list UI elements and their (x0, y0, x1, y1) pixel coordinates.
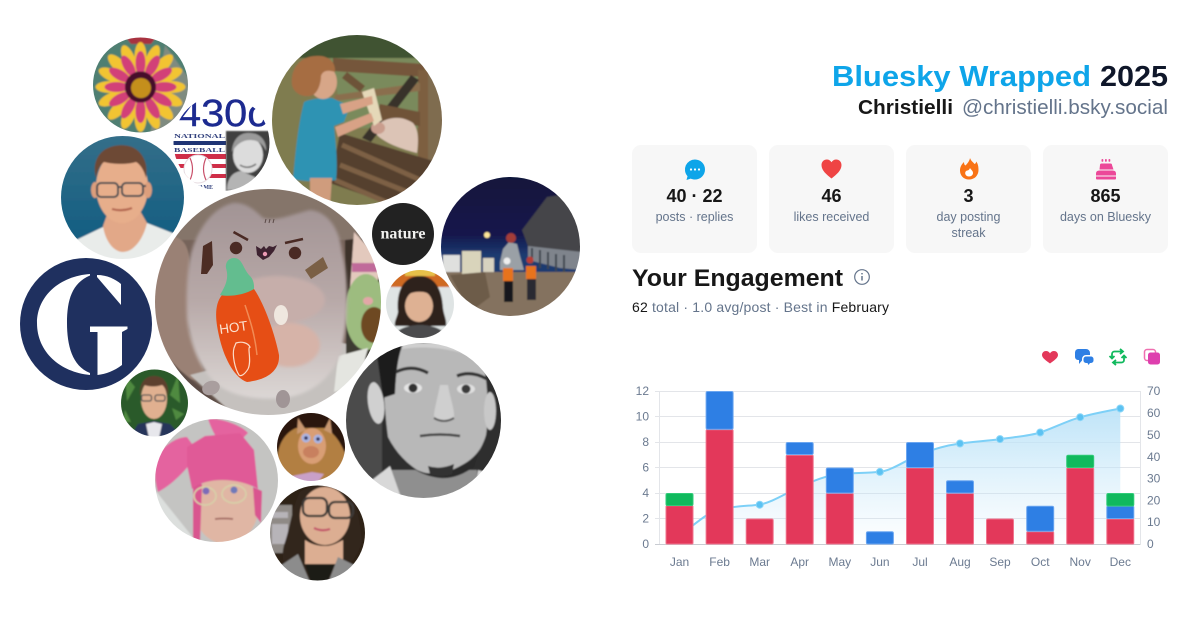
hot sauce bottle (216, 258, 279, 382)
month labels: Jun (870, 555, 890, 569)
left axis labels: 12 (636, 384, 649, 398)
panel: days on Bluesky (1043, 145, 1168, 253)
heading: your engagement: Your Engagement (632, 265, 843, 292)
gridlines (655, 391, 1140, 544)
right axis labels: 70 (1147, 384, 1161, 398)
left axis labels: 8 (642, 435, 649, 449)
title: 2025 (1100, 61, 1168, 93)
panel: likes received: 46 (821, 186, 842, 206)
legend icons (1042, 349, 1160, 365)
avatar: woman in pink hat (155, 419, 278, 542)
icon: flame (960, 158, 978, 180)
month labels: Aug (949, 555, 971, 569)
panel: likes received (769, 145, 894, 253)
left axis labels (636, 384, 649, 551)
month labels: Nov (1070, 555, 1091, 569)
month labels: Mar (749, 555, 770, 569)
panel: days on Bluesky: 865 (1090, 186, 1121, 206)
stacked bars (666, 392, 1134, 544)
user name and handle (858, 97, 1168, 119)
right axis labels: 30 (1147, 472, 1161, 486)
cat face (201, 219, 328, 279)
month labels: May (828, 555, 851, 569)
icon: info (855, 270, 869, 284)
engagement summary: 62 total · 1.0 avg/post · Best in February (632, 299, 889, 315)
plush feet (202, 380, 220, 396)
chart: monthly engagement (636, 384, 1161, 569)
avatar: black and white portrait (344, 340, 504, 500)
month labels: Jan (670, 555, 689, 569)
avatar: man in navy jacket (121, 370, 188, 436)
avatar: flower (90, 35, 190, 135)
panel: posts and replies: posts · replies (656, 210, 733, 224)
cumulative line (680, 405, 1124, 535)
right axis labels: 40 (1147, 450, 1161, 464)
panel: likes received: likes received (794, 210, 869, 224)
panel: posts and replies (632, 145, 757, 253)
panel: posts and replies: 40 · 22 (666, 186, 723, 206)
hall of fame badge: BASEBALL (174, 147, 226, 154)
portrait inset (226, 131, 272, 191)
avatar: woman with glasses and curly hair (268, 483, 368, 583)
child (293, 98, 350, 181)
icon: birthday cake (1096, 159, 1116, 180)
month labels: Dec (1110, 555, 1131, 569)
text: nature: nature (380, 226, 426, 242)
avatar: Nature logo (372, 203, 434, 265)
month labels: Jul (912, 555, 928, 569)
panel: day posting streak (906, 145, 1031, 253)
plush body (187, 203, 347, 408)
panel: day posting streak: day posting (937, 210, 1001, 224)
left axis labels: 2 (642, 512, 649, 526)
avatar: The Guardian G logo (20, 258, 152, 390)
icon: reposts (1110, 349, 1126, 365)
title: Bluesky Wrapped (832, 61, 1091, 93)
avatar: Miss Piggy puppet (277, 413, 345, 481)
icon: heart (822, 160, 842, 178)
icon: likes (1042, 351, 1058, 364)
hot sauce bottle: HOT (218, 318, 249, 337)
avatar: night construction site (438, 175, 583, 320)
left axis labels: 6 (642, 460, 649, 474)
panel: days on Bluesky: days on Bluesky (1060, 210, 1152, 224)
avatar: 430c and baseball hall of fame collage (174, 99, 270, 191)
avatar: woman with dark hair (386, 270, 454, 338)
user name and handle: Christielli (858, 97, 953, 119)
avatar: man with glasses on teal background (61, 136, 184, 259)
workers (503, 268, 513, 281)
right axis labels: 50 (1147, 428, 1161, 442)
month labels: Oct (1031, 555, 1050, 569)
left axis labels: 0 (642, 537, 649, 551)
avatar: child feeding a pig (270, 32, 446, 213)
month labels: Sep (989, 555, 1011, 569)
panel: avatar bubble cluster (20, 32, 583, 583)
right axis labels: 60 (1147, 406, 1161, 420)
icon: speech bubble (685, 159, 705, 180)
panel: day posting streak: streak (951, 226, 986, 240)
month labels (670, 555, 1131, 569)
text: 430c logo: 430c (178, 93, 268, 135)
right axis labels (1147, 384, 1161, 551)
cumulative area (680, 408, 1120, 544)
icon: replies (1075, 349, 1094, 365)
user name and handle: @christielli.bsky.social (962, 97, 1168, 119)
month labels: Apr (790, 555, 809, 569)
right axis labels: 0 (1147, 537, 1154, 551)
month labels: Feb (709, 555, 730, 569)
hall of fame badge: NATIONAL (174, 133, 226, 140)
left axis labels: 4 (642, 486, 649, 500)
icon: quotes (1144, 350, 1160, 364)
right axis labels: 10 (1147, 515, 1161, 529)
hall of fame badge (172, 133, 226, 191)
hall of fame badge: R FAME (190, 185, 213, 191)
right axis labels: 20 (1147, 494, 1161, 508)
left axis labels: 10 (636, 410, 649, 424)
panel: day posting streak: 3 (963, 186, 974, 206)
avatar: plush cat with hot sauce (149, 185, 387, 421)
